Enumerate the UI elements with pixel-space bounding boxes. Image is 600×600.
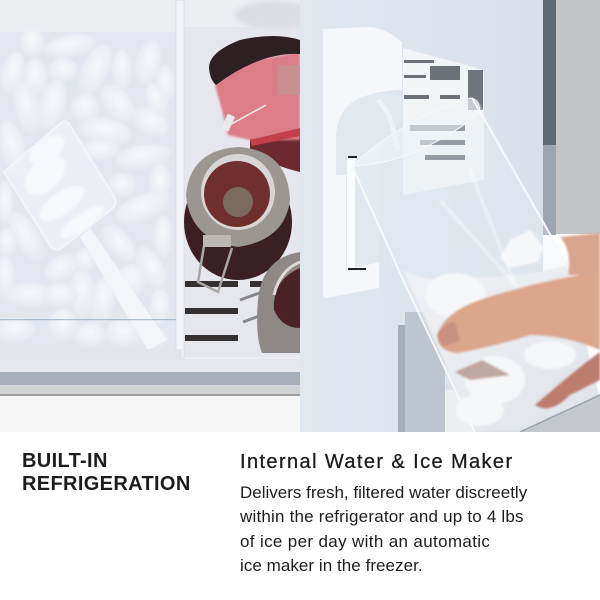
photo: freezer drawer with ice <box>0 0 315 432</box>
dispenser <box>323 27 402 298</box>
jar: lower right <box>240 252 300 353</box>
subheading: Internal Water & Ice Maker <box>240 451 514 473</box>
jar: red fruit <box>209 36 300 172</box>
description <box>240 483 528 575</box>
photo panels <box>0 0 600 432</box>
photo: water dispenser with glass <box>300 0 600 432</box>
description: within the refrigerator and up to 4 lbs <box>240 507 524 526</box>
heading: built-in refrigeration: REFRIGERATION <box>22 473 191 495</box>
fridge frame bottom <box>0 359 300 378</box>
heading: built-in refrigeration <box>22 450 191 495</box>
hand <box>437 233 600 408</box>
vent slots <box>185 281 262 341</box>
description: Delivers fresh, filtered water discreetly <box>240 483 527 502</box>
appliance label <box>403 48 484 195</box>
description: of ice per day with an automatic <box>240 532 490 551</box>
ice cubes <box>0 27 174 348</box>
heading: built-in refrigeration: BUILT-IN <box>22 450 108 472</box>
ice bin <box>0 32 176 350</box>
glass of water and ice <box>352 98 600 432</box>
description: ice maker in the freezer. <box>240 556 423 575</box>
bin edge <box>176 0 184 358</box>
jar: dark berries <box>184 147 292 292</box>
ice scoop <box>4 121 167 350</box>
